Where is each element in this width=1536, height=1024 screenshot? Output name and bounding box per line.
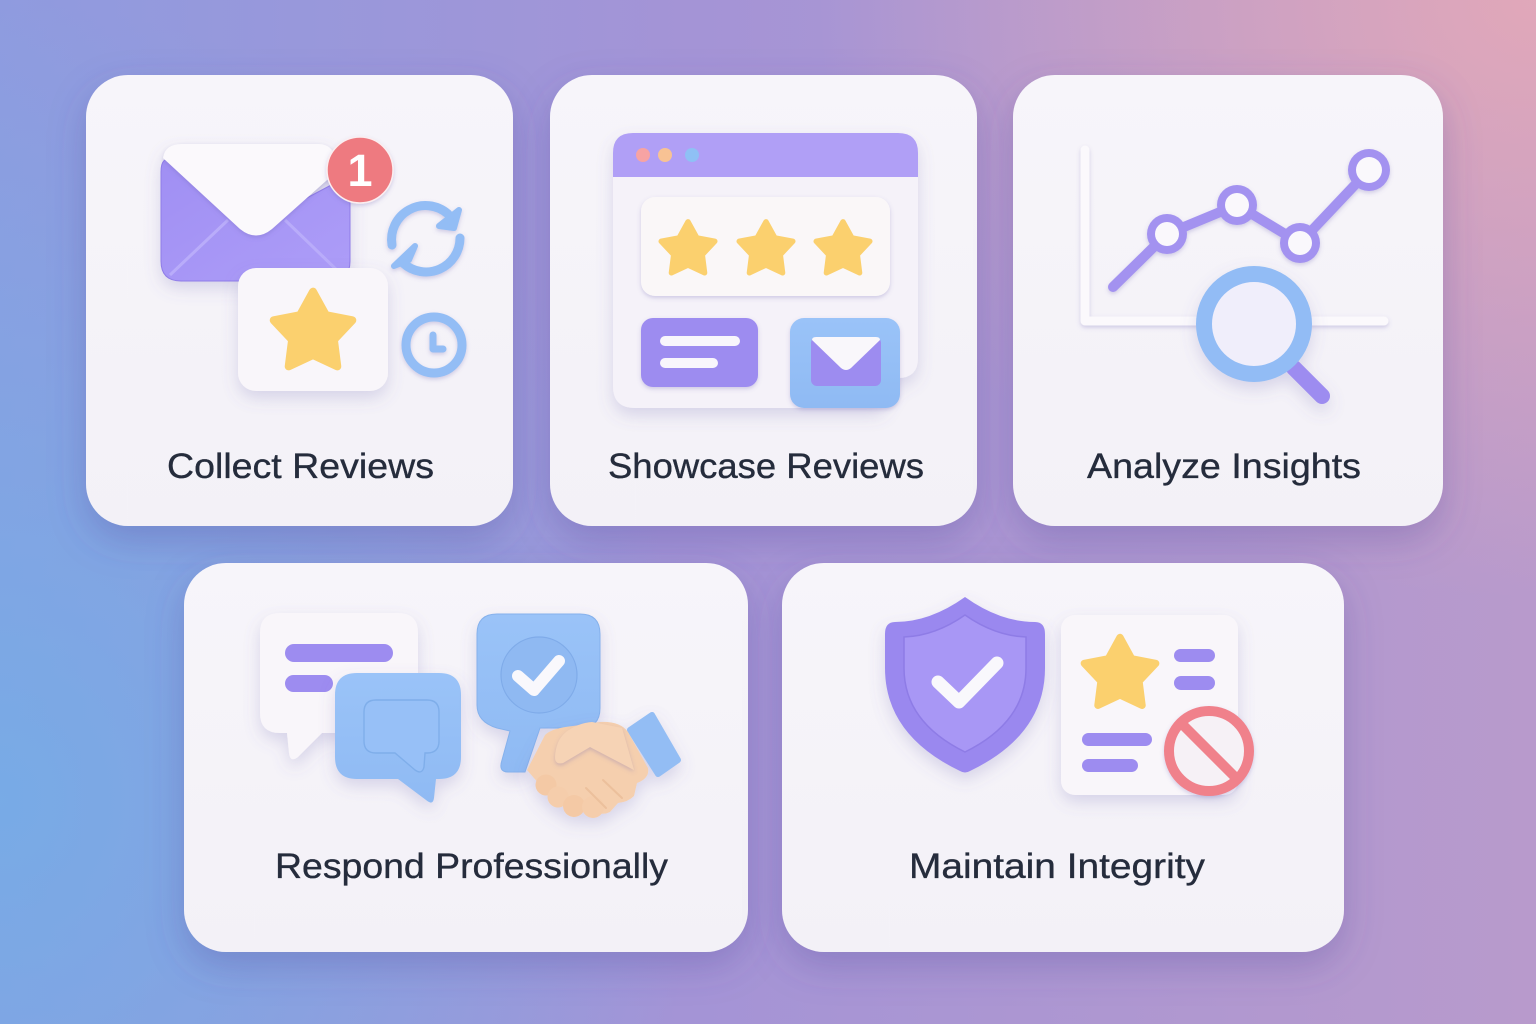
email button: [790, 318, 900, 408]
label: Maintain Integrity: [909, 847, 1206, 886]
card background: [550, 75, 977, 526]
icon: shield with check: [885, 597, 1045, 772]
panel: showcase reviews: [550, 75, 977, 526]
icon: handshake: [527, 715, 678, 818]
label: Collect Reviews: [167, 447, 434, 486]
text button: [641, 318, 758, 387]
icon: prohibition sign: [1169, 711, 1249, 791]
icon: star card: [238, 268, 388, 391]
line chart: [1113, 149, 1390, 287]
icon: review document: [1061, 615, 1238, 795]
card background: [782, 563, 1344, 952]
icon: clock: [406, 317, 462, 373]
label: Showcase Reviews: [608, 447, 924, 486]
chart axes: [1085, 150, 1384, 321]
panel: analyze insights: [1013, 75, 1443, 526]
card background: [184, 563, 748, 952]
icon: sync arrows: [392, 206, 460, 272]
icon: browser window: [613, 133, 918, 408]
panel: collect reviews: [86, 75, 513, 526]
panel: maintain integrity: [782, 563, 1344, 952]
icon: blue speech bubble: [335, 673, 461, 803]
icon: notification badge: [327, 137, 393, 203]
panel: respond professionally: [184, 563, 748, 952]
rating card with stars: [641, 197, 890, 296]
badge number: 1: [347, 145, 373, 196]
card background: [1013, 75, 1443, 526]
icon: check badge bubble: [477, 614, 600, 772]
icon: magnifying glass: [1204, 274, 1322, 396]
icon: white speech bubble: [260, 613, 418, 759]
card background: [86, 75, 513, 526]
icon: envelope: [161, 144, 350, 281]
label: Respond Professionally: [275, 847, 669, 886]
label: Analyze Insights: [1087, 447, 1361, 486]
